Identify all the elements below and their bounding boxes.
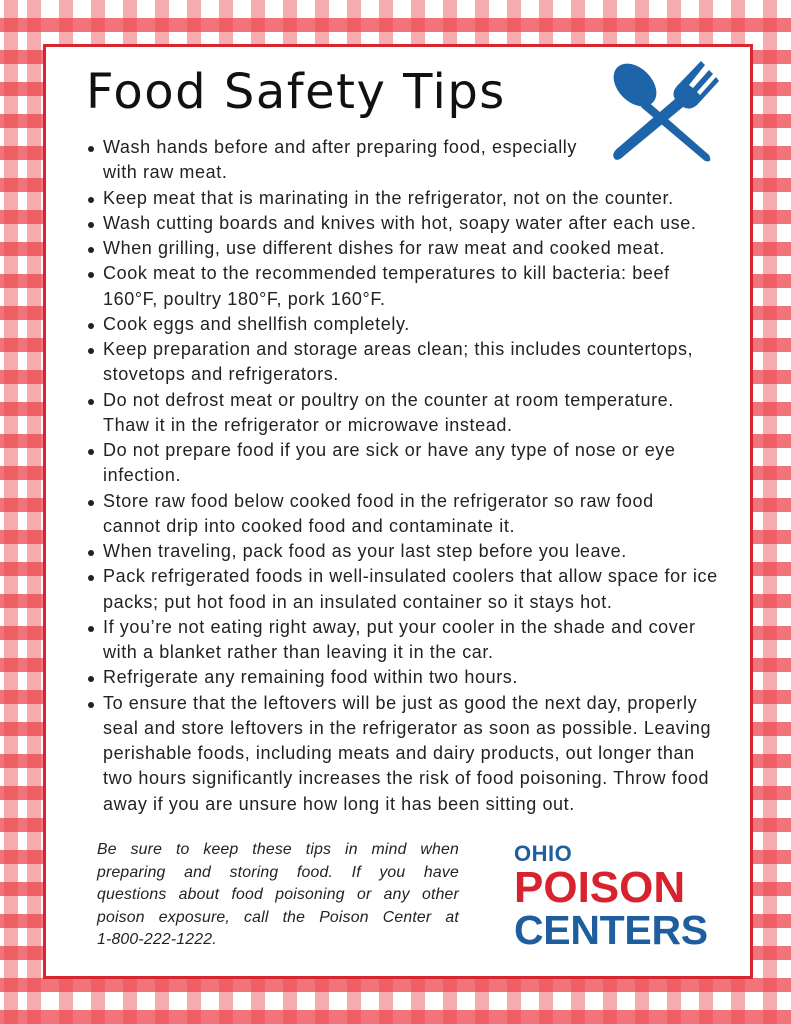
logo: Ohio Poison Centers: OHIO: [514, 841, 572, 866]
logo: Ohio Poison Centers: POISON: [514, 863, 685, 912]
text block: tips list: with a blanket rather than leaving it in the car.: [103, 642, 494, 662]
text block: tips list: infection.: [103, 465, 181, 485]
text block: tips list: When grilling, use different dishes for raw meat and cooked meat.: [103, 238, 665, 258]
text block: tips list: Refrigerate any remaining food within two hours.: [103, 667, 518, 687]
text block: footer note: [96, 841, 460, 948]
text block: tips list: packs; put hot food in an insulated container so it stays hot.: [103, 592, 612, 612]
logo: Ohio Poison Centers: [514, 841, 708, 953]
text block: tips list: [88, 137, 718, 814]
text block: tips list: Wash cutting boards and knives with hot, soapy water after each use.: [103, 213, 696, 233]
text block: footer note: Be sure to keep these tips in mind when: [97, 841, 459, 858]
text block: tips list: 160°F, poultry 180°F, pork 160°F.: [103, 288, 386, 308]
text block: tips list: Do not prepare food if you are sick or have any type of nose or eye: [103, 440, 676, 460]
text block: tips list: Do not defrost meat or poultry on the counter at room temperature.: [103, 390, 674, 410]
text block: footer note: poison exposure, call the Poison Center at: [97, 909, 459, 926]
text block: tips list: Keep preparation and storage areas clean; this includes countertops,: [103, 339, 693, 359]
text block: tips list: Thaw it in the refrigerator or microwave instead.: [103, 415, 513, 435]
text block: tips list: Wash hands before and after preparing food, especially: [103, 137, 577, 157]
text block: tips list: away if you are unsure how long it has been sitting out.: [103, 794, 575, 814]
logo: Ohio Poison Centers: CENTERS: [514, 907, 708, 953]
text block: tips list: If you’re not eating right away, put your cooler in the shade and cover: [103, 617, 696, 637]
text block: tips list: Pack refrigerated foods in well-insulated coolers that allow space for ice: [103, 566, 718, 586]
text block: tips list: seal and store leftovers in the refrigerator as soon as possible. Leaving: [103, 718, 711, 738]
text block: footer note: questions about food poisoning or any other: [97, 886, 459, 903]
text block: footer note: preparing and storing food. If you have: [97, 864, 459, 881]
icon: spoon and fork: [613, 61, 719, 162]
text block: tips list: perishable foods, including meats and dairy products, out longer than: [103, 743, 695, 763]
title: Food Safety Tips: [86, 64, 506, 120]
text block: tips list: stovetops and refrigerators.: [103, 364, 339, 384]
text block: footer note: 1-800-222-1222.: [97, 931, 217, 948]
text block: tips list: Store raw food below cooked food in the refrigerator so raw food: [103, 490, 654, 510]
text block: tips list: To ensure that the leftovers will be just as good the next day, properly: [103, 692, 697, 712]
text block: tips list: two hours significantly increases the risk of food poisoning. Throw food: [103, 768, 709, 788]
text block: tips list: with raw meat.: [103, 162, 227, 182]
text block: tips list: Cook meat to the recommended temperatures to kill bacteria: beef: [103, 263, 670, 283]
text block: tips list: Keep meat that is marinating in the refrigerator, not on the counter.: [103, 188, 674, 208]
text block: tips list: Cook eggs and shellfish completely.: [103, 314, 410, 334]
text block: tips list: cannot drip into cooked food and contaminate it.: [103, 516, 515, 536]
text block: tips list: When traveling, pack food as your last step before you leave.: [103, 541, 627, 561]
